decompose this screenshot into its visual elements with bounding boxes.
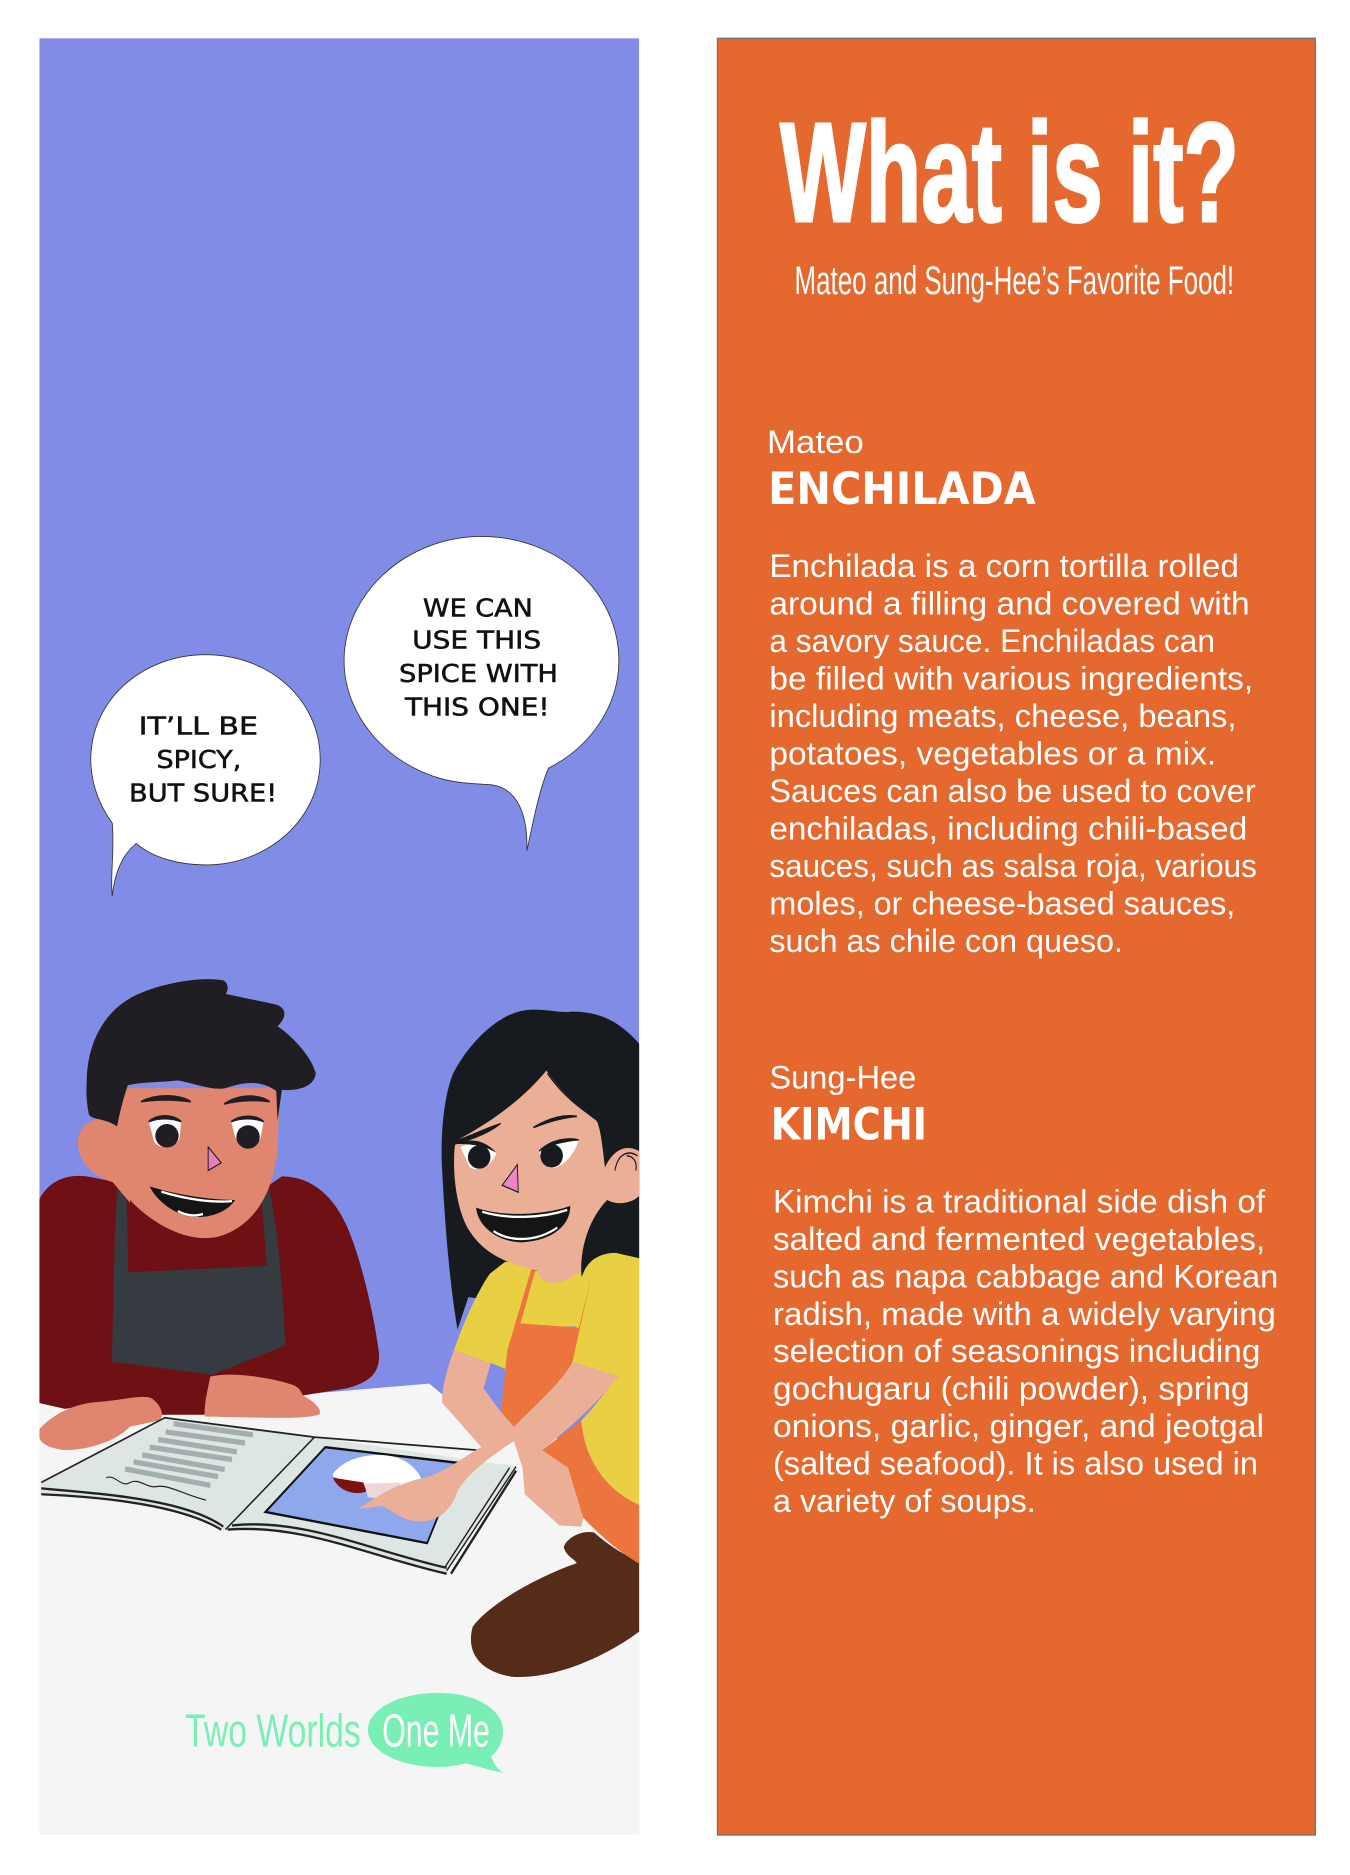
- book picture: [265, 1447, 460, 1543]
- Kimchi description: (salted seafood). It is also used in: [773, 1445, 1258, 1481]
- Kimchi description: selection of seasonings including: [773, 1333, 1260, 1369]
- Enchilada description: potatoes, vegetables or a mix.: [769, 736, 1216, 772]
- Kimchi description: salted and fermented vegetables,: [773, 1221, 1265, 1257]
- Enchilada description: moles, or cheese-based sauces,: [769, 886, 1235, 922]
- Kimchi description: onions, garlic, ginger, and jeotgal: [773, 1408, 1264, 1444]
- Enchilada description: Sauces can also be used to cover: [769, 773, 1256, 809]
- Mateo section: ENCHILADA: [768, 464, 1036, 515]
- speech bubble: Mateo: BUT SURE!: [129, 779, 277, 808]
- Enchilada description: such as chile con queso.: [769, 923, 1123, 959]
- Mateo section: [767, 424, 1257, 959]
- Enchilada description: Enchilada is a corn tortilla rolled: [769, 548, 1239, 584]
- Enchilada description: including meats, cheese, beans,: [769, 698, 1237, 734]
- speech bubble: Sung-Hee: SPICE WITH: [399, 659, 558, 688]
- Kimchi description: [773, 1184, 1278, 1519]
- Kimchi description: gochugaru (chili powder), spring: [773, 1371, 1250, 1407]
- character: Mateo: [39, 979, 379, 1450]
- speech bubble: Sung-Hee: USE THIS: [412, 626, 541, 655]
- table: [39, 1384, 642, 1839]
- speech bubble: Mateo: IT’LL BE: [139, 712, 258, 741]
- table and characters scene: [39, 979, 642, 1839]
- panel: what is it: [717, 38, 1315, 1835]
- logo: Two Worlds One Me: [185, 1693, 503, 1773]
- speech bubble: Sung-Hee: [344, 536, 619, 851]
- Enchilada description: around a filling and covered with: [769, 586, 1250, 622]
- speech bubble: Sung-Hee: THIS ONE!: [404, 693, 550, 722]
- Mateo section: Mateo: [767, 424, 864, 460]
- speech bubble: Mateo: [91, 655, 320, 896]
- Kimchi description: a variety of soups.: [773, 1483, 1036, 1519]
- panel: illustration: [39, 38, 642, 1839]
- Kimchi description: such as napa cabbage and Korean: [773, 1258, 1278, 1294]
- logo: Two Worlds One Me: One Me: [382, 1705, 490, 1757]
- Kimchi description: Kimchi is a traditional side dish of: [773, 1184, 1265, 1220]
- open book: [41, 1418, 516, 1574]
- Sung-Hee section: KIMCHI: [771, 1100, 927, 1151]
- Enchilada description: [769, 548, 1257, 959]
- speech bubble: Mateo: SPICY,: [157, 745, 241, 774]
- speech bubble: Sung-Hee: WE CAN: [423, 593, 533, 622]
- logo: Two Worlds One Me: Two Worlds: [185, 1705, 361, 1757]
- Sung-Hee section: [769, 1059, 1278, 1519]
- Enchilada description: sauces, such as salsa roja, various: [769, 848, 1257, 884]
- book text lines: [125, 1424, 253, 1485]
- Enchilada description: be filled with various ingredients,: [769, 661, 1253, 697]
- character: Sung-Hee: [358, 1010, 642, 1677]
- Enchilada description: enchiladas, including chili-based: [769, 811, 1247, 847]
- Sung-Hee section: Sung-Hee: [769, 1059, 916, 1095]
- Kimchi description: radish, made with a widely varying: [773, 1296, 1276, 1332]
- Enchilada description: a savory sauce. Enchiladas can: [769, 623, 1215, 659]
